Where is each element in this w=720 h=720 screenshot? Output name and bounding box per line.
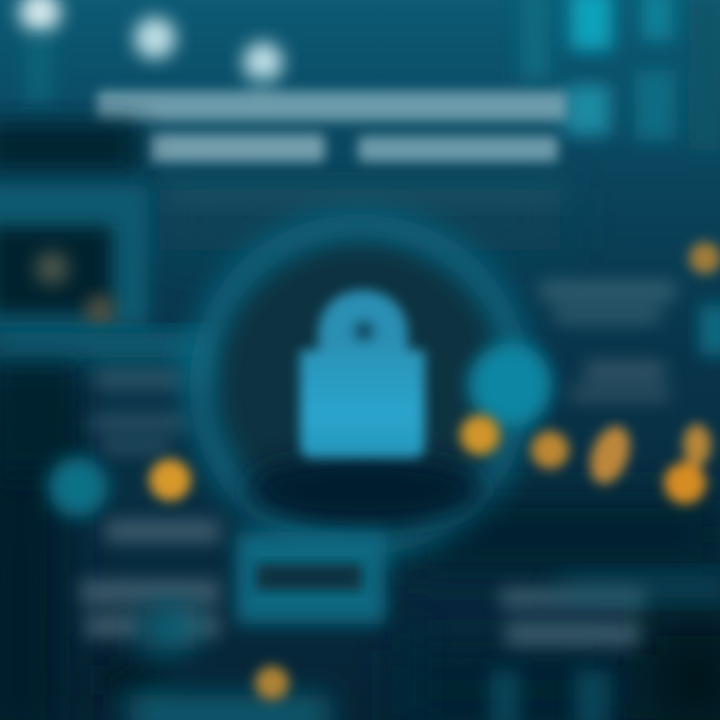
dot <box>531 431 569 469</box>
dot <box>460 415 500 455</box>
lower left shapes <box>100 605 330 720</box>
heading: blurred title <box>97 91 567 162</box>
shackle <box>318 290 408 360</box>
pedestal frame <box>236 532 386 624</box>
card frame <box>0 185 148 327</box>
dot <box>683 424 711 466</box>
dot 2 <box>134 17 176 59</box>
text block: right upper <box>540 282 675 322</box>
blurred text <box>90 370 190 452</box>
subtitle blurred <box>165 183 565 205</box>
icon: padlock <box>300 290 425 458</box>
icon: teal blob <box>48 457 108 517</box>
padlock ring <box>200 225 520 545</box>
keyhole <box>353 320 375 342</box>
background shading <box>0 190 720 720</box>
text block: right middle <box>570 362 670 400</box>
pedestal <box>236 532 386 624</box>
card inner <box>0 365 80 475</box>
icon: right ring node <box>468 343 552 427</box>
dark band left <box>0 122 140 170</box>
panel: left upper card <box>0 185 148 327</box>
card icon <box>35 251 69 285</box>
ring stroke <box>200 225 520 545</box>
top white dots <box>19 0 283 82</box>
lock body <box>300 350 425 458</box>
card accent <box>86 296 114 324</box>
right edge teal <box>700 305 720 355</box>
card frame <box>0 345 205 390</box>
dot 1 <box>19 0 61 33</box>
dot <box>664 462 706 504</box>
dot 3 <box>243 42 283 82</box>
dot <box>583 421 637 489</box>
bottom columns <box>400 620 610 720</box>
dot <box>689 242 720 274</box>
dot stems <box>25 35 272 105</box>
top right columns <box>520 0 720 150</box>
dot <box>255 666 289 700</box>
lower dark <box>245 456 485 524</box>
panel: left lower card <box>0 345 205 475</box>
dot <box>149 459 191 501</box>
text block: lower left <box>80 520 220 637</box>
pedestal inner <box>256 564 362 590</box>
text block: lower right <box>500 588 645 646</box>
lower right teal band <box>560 575 720 599</box>
card inner <box>0 226 112 314</box>
ring interior <box>210 235 510 535</box>
orange accent dots <box>149 242 720 700</box>
